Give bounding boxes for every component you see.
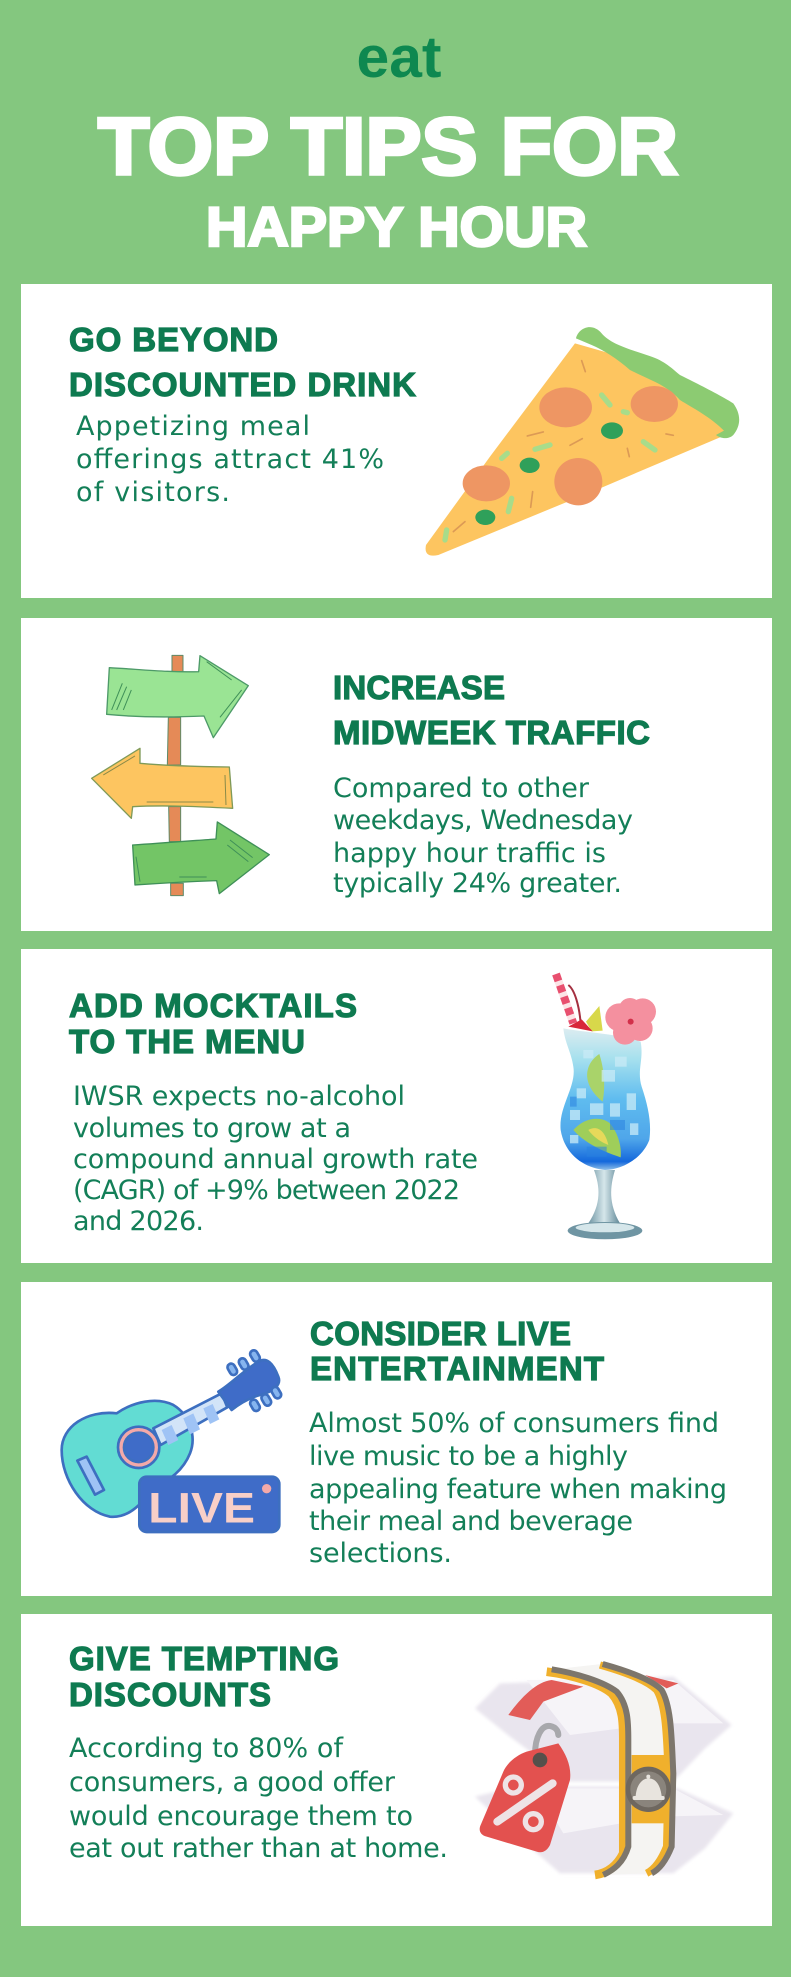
heading: add mocktails to the menu: TO THE MENU <box>69 1023 305 1060</box>
icon: guitar with live badge <box>62 1349 282 1533</box>
panel: add mocktails <box>21 949 772 1263</box>
text: live music appeal: live music to be a highly <box>309 1441 628 1472</box>
text: good offer: eat out rather than at home. <box>69 1833 448 1864</box>
logo: eat: eat <box>356 25 442 90</box>
heading: increase midweek traffic: MIDWEEK TRAFFIC <box>333 714 650 751</box>
panel: increase midweek traffic <box>21 618 772 931</box>
text: appetizing meal: of visitors. <box>76 477 230 508</box>
heading: go beyond discounted drink <box>69 321 416 403</box>
text: iwsr forecast: IWSR expects no-alcohol <box>73 1081 405 1112</box>
icon: blue cocktail <box>556 974 656 1239</box>
text: good offer <box>69 1733 448 1864</box>
text: live music appeal: their meal and beverage <box>309 1506 633 1537</box>
text: wednesday traffic <box>333 773 633 899</box>
icon: pizza slice <box>426 327 739 556</box>
heading: increase midweek traffic <box>333 669 650 751</box>
icon: takeaway boxes with discount tag <box>475 1664 733 1875</box>
panel: live entertainment <box>21 1282 772 1596</box>
heading: give tempting discounts: GIVE TEMPTING <box>69 1640 339 1677</box>
text: live music appeal: appealing feature when making <box>309 1474 727 1505</box>
text: good offer: consumers, a good offer <box>69 1767 396 1798</box>
text: live music appeal: Almost 50% of consumers find <box>309 1408 719 1439</box>
icon: guitar with live badge: LIVE <box>148 1485 255 1533</box>
text: appetizing meal: Appetizing meal <box>76 411 310 442</box>
text: live music appeal <box>309 1408 727 1569</box>
heading: consider live entertainment <box>310 1315 604 1387</box>
title <box>98 102 678 258</box>
heading: add mocktails to the menu <box>69 987 357 1060</box>
heading: go beyond discounted drink: DISCOUNTED DRINK <box>69 366 416 403</box>
heading: consider live entertainment: CONSIDER LIVE <box>310 1315 571 1352</box>
text: appetizing meal <box>76 411 384 508</box>
text: live music appeal: selections. <box>309 1538 452 1569</box>
text: appetizing meal: offerings attract 41% <box>76 444 384 475</box>
heading: give tempting discounts: DISCOUNTS <box>69 1676 271 1713</box>
text: iwsr forecast: compound annual growth rate <box>73 1144 478 1175</box>
text: good offer: According to 80% of <box>69 1733 344 1764</box>
title: TOP TIPS FOR <box>98 102 678 192</box>
text: good offer: would encourage them to <box>69 1801 413 1832</box>
heading: consider live entertainment: ENTERTAINMENT <box>310 1350 604 1387</box>
text: wednesday traffic: happy hour traffic is <box>333 838 606 869</box>
text: wednesday traffic: weekdays, Wednesday <box>333 805 633 836</box>
heading: increase midweek traffic: INCREASE <box>333 669 505 706</box>
heading: go beyond discounted drink: GO BEYOND <box>69 321 278 358</box>
icon: signpost arrows <box>92 655 269 896</box>
text: wednesday traffic: Compared to other <box>333 773 590 804</box>
panel: go beyond discounted drink <box>21 284 772 598</box>
text: wednesday traffic: typically 24% greater. <box>333 868 622 899</box>
title: HAPPY HOUR <box>206 195 587 258</box>
text: iwsr forecast: volumes to grow at a <box>73 1113 351 1144</box>
text: iwsr forecast: (CAGR) of +9% between 2022 <box>73 1175 460 1206</box>
panel: tempting discounts <box>21 1614 772 1926</box>
text: iwsr forecast <box>73 1081 478 1237</box>
heading: add mocktails to the menu: ADD MOCKTAILS <box>69 987 357 1024</box>
text: iwsr forecast: and 2026. <box>73 1206 204 1237</box>
heading: give tempting discounts <box>69 1640 339 1713</box>
